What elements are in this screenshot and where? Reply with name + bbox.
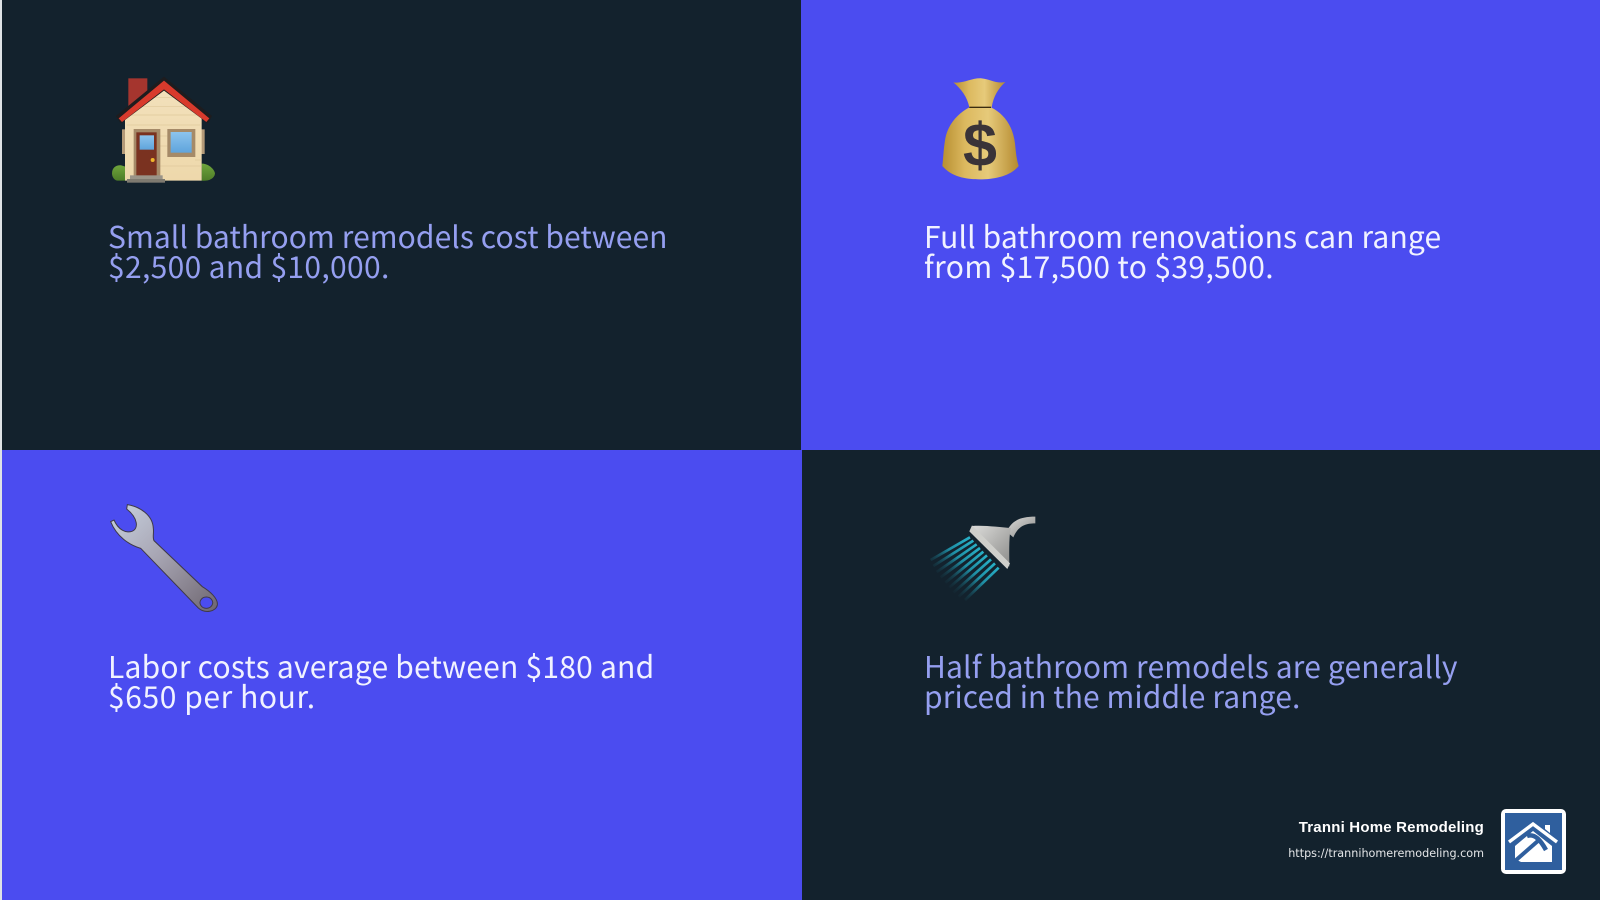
- brand name: Tranni Home Remodeling: [1299, 819, 1484, 836]
- text: small bathroom remodels: Small bathroom remodels cost between: [108, 213, 668, 257]
- text: full bathroom renovations: Full bathroom renovations can range: [924, 213, 1441, 257]
- icon: money bag: [942, 78, 1019, 180]
- icon: shower head: [930, 516, 1036, 600]
- panel: full bathroom: [801, 0, 1600, 450]
- text: full bathroom renovations: from $17,500 to $39,500.: [924, 243, 1274, 287]
- panel: small bathroom: [2, 0, 801, 450]
- panel: labor costs: [2, 450, 802, 900]
- text: half bathroom remodels: priced in the middle range.: [924, 673, 1300, 717]
- text: small bathroom remodels: [108, 213, 668, 287]
- logo: [1501, 809, 1566, 874]
- text: half bathroom remodels: Half bathroom remodels are generally: [924, 643, 1458, 687]
- dollar glyph: $: [963, 111, 997, 179]
- text: half bathroom remodels: [924, 643, 1458, 717]
- text: labor costs: [108, 643, 654, 717]
- text: labor costs: Labor costs average between $180 and: [108, 643, 654, 687]
- icon: wrench: [110, 504, 218, 612]
- icon: house: [112, 77, 215, 183]
- text: small bathroom remodels: $2,500 and $10,000.: [108, 243, 390, 287]
- text: labor costs: $650 per hour.: [108, 673, 316, 717]
- brand url: https://trannihomeremodeling.com: [1288, 847, 1484, 860]
- text: full bathroom renovations: [924, 213, 1441, 287]
- brand footer: [1288, 809, 1566, 874]
- panel: half bathroom: [802, 450, 1600, 900]
